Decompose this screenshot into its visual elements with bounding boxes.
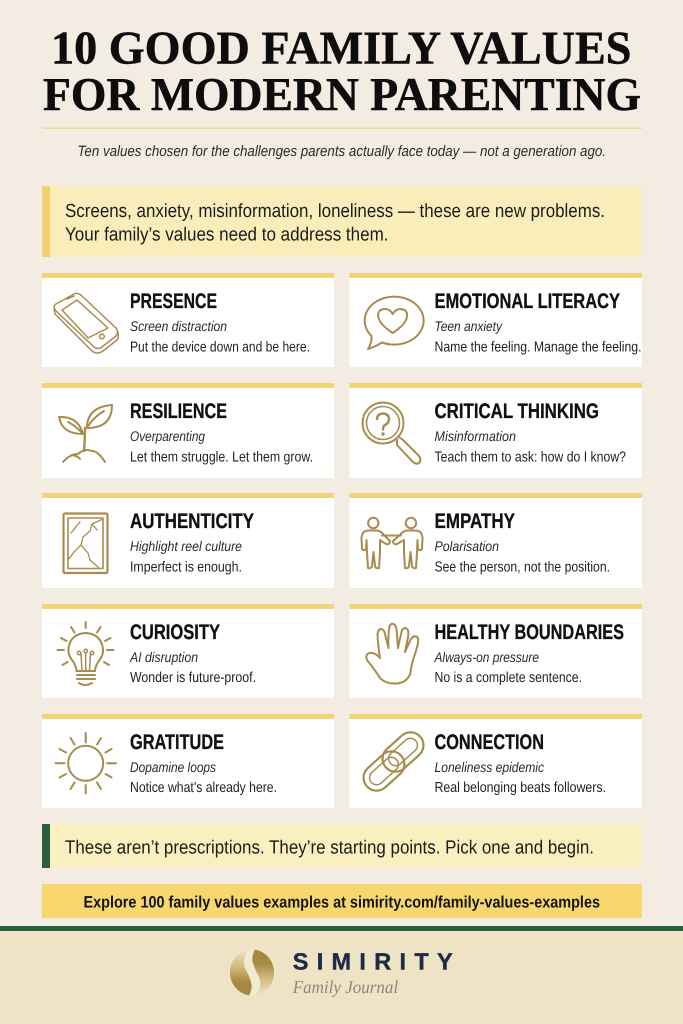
challenge: Polarisation	[434, 538, 499, 554]
heading: AUTHENTICITY	[130, 510, 254, 533]
challenge: Screen distraction	[130, 318, 227, 334]
panel: gratitude	[42, 714, 334, 808]
challenge: Highlight reel culture	[130, 538, 242, 554]
brand name: SIMIRITY	[293, 949, 453, 975]
heading: CONNECTION	[434, 731, 544, 754]
intro callout	[42, 186, 642, 257]
logo mark	[229, 949, 275, 996]
icon: magnifier	[362, 402, 420, 464]
heading: EMPATHY	[434, 510, 515, 533]
tip: Notice what’s already here.	[130, 780, 277, 796]
icon: sun	[56, 733, 116, 794]
panel: resilience	[42, 383, 334, 478]
call to action banner	[42, 884, 642, 918]
icon: light bulb	[58, 622, 114, 685]
heading: HEALTHY BOUNDARIES	[434, 621, 624, 644]
tip: Let them struggle. Let them grow.	[130, 450, 313, 466]
heading: CURIOSITY	[130, 621, 220, 644]
closing callout	[42, 824, 642, 868]
tip: See the person, not the position.	[434, 560, 610, 576]
title	[43, 22, 641, 121]
challenge: Always-on pressure	[434, 649, 539, 665]
icon: cracked mirror	[64, 514, 108, 573]
panel: empathy	[350, 493, 642, 588]
title: 10 GOOD FAMILY VALUES	[51, 22, 632, 74]
heading: RESILIENCE	[130, 400, 227, 423]
closing callout: These aren’t prescriptions. They’re starting points. Pick one and begin.	[65, 837, 594, 858]
challenge: Overparenting	[130, 428, 205, 444]
tip: Teach them to ask: how do I know?	[434, 450, 626, 466]
brand tagline: Family Journal	[292, 977, 398, 997]
panel: presence	[42, 273, 334, 367]
heading: EMOTIONAL LITERACY	[434, 290, 620, 313]
icon: speech bubble heart	[365, 297, 424, 349]
subtitle: Ten values chosen for the challenges parents actually face today — not a generation ago.	[78, 143, 606, 160]
call to action banner: Explore 100 family values examples at simirity.com/family-values-examples	[84, 894, 600, 912]
heading: GRATITUDE	[130, 731, 224, 754]
tip: Wonder is future-proof.	[130, 670, 256, 686]
intro callout: Your family’s values need to address them.	[65, 224, 388, 246]
icon: two people	[362, 518, 422, 568]
icon: chain links	[358, 727, 429, 796]
challenge: Misinformation	[434, 428, 516, 444]
panel: connection	[350, 714, 642, 808]
tip: Real belonging beats followers.	[434, 780, 606, 796]
tip: Imperfect is enough.	[130, 560, 242, 576]
icon: raised hand	[366, 624, 418, 684]
panel: authenticity	[42, 493, 334, 588]
panel: curiosity	[42, 604, 334, 698]
intro callout: Screens, anxiety, misinformation, loneliness — these are new problems.	[65, 201, 605, 222]
tip: No is a complete sentence.	[434, 670, 582, 686]
icon: phone	[54, 293, 118, 353]
footer	[0, 926, 683, 1024]
challenge: Dopamine loops	[130, 759, 216, 775]
heading: CRITICAL THINKING	[434, 400, 599, 423]
icon: sprout	[59, 405, 112, 462]
panel: critical thinking	[350, 383, 642, 478]
tip: Put the device down and be here.	[130, 340, 310, 356]
challenge: Teen anxiety	[434, 318, 503, 334]
panel: emotional literacy	[350, 273, 642, 367]
tip: Name the feeling. Manage the feeling.	[434, 340, 642, 356]
panel: healthy boundaries	[350, 604, 642, 698]
challenge: AI disruption	[129, 649, 198, 665]
title: FOR MODERN PARENTING	[43, 69, 641, 121]
challenge: Loneliness epidemic	[434, 759, 544, 775]
heading: PRESENCE	[130, 290, 217, 313]
